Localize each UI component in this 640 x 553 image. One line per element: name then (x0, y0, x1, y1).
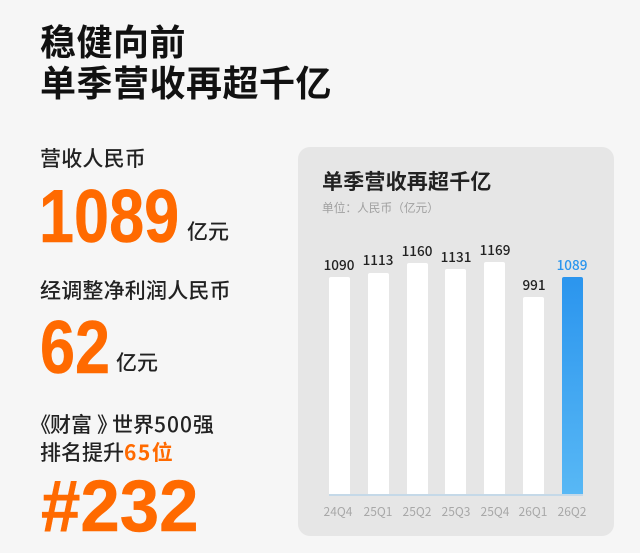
bar chart (324, 239, 587, 520)
unit: net profit: 亿元 (116, 347, 158, 377)
bar 25Q3 (445, 269, 466, 495)
unit: revenue: 亿元 (187, 216, 229, 246)
title: 单季营收再超千亿 (40, 55, 332, 107)
label 25Q3: 25Q3 (442, 503, 470, 520)
bar 26Q1 (523, 297, 544, 495)
value 1089: 1089 (557, 254, 587, 274)
label: revenue: 营收人民币 (40, 143, 146, 173)
label 25Q1: 25Q1 (364, 503, 392, 520)
label 25Q4: 25Q4 (481, 503, 509, 520)
label 24Q4: 24Q4 (324, 503, 352, 520)
bar 25Q1 (368, 273, 389, 495)
chart heading: 单季营收再超千亿 (322, 166, 492, 196)
baseline (329, 494, 583, 496)
value 1131: 1131 (441, 246, 471, 266)
panel: quarterly revenue chart (298, 147, 614, 536)
title: 稳健向前 (40, 14, 186, 66)
bar 24Q4 (329, 277, 350, 495)
label 26Q1: 26Q1 (519, 503, 547, 520)
metric: net profit 62: 62 (40, 305, 110, 389)
label: adjusted net profit: 经调整净利润人民币 (40, 275, 231, 305)
value 991: 991 (522, 274, 546, 294)
label 25Q2: 25Q2 (403, 503, 431, 520)
metric: rank 232: #232 (41, 466, 199, 547)
title (40, 14, 332, 107)
metric: revenue 1089: 1089 (39, 174, 179, 258)
value 1113: 1113 (363, 249, 393, 269)
label: Fortune 500: 排名提升65位 (40, 437, 174, 467)
bar 25Q4 (484, 262, 505, 495)
value 1169: 1169 (480, 239, 510, 259)
bar 25Q2 (407, 263, 428, 495)
bar 26Q2 (562, 277, 583, 495)
value 1090: 1090 (324, 254, 354, 274)
label: Fortune 500: 《财富》世界500强 (30, 409, 214, 439)
label 26Q2: 26Q2 (558, 503, 586, 520)
value 1160: 1160 (402, 240, 432, 260)
label: Fortune 500 (30, 409, 214, 467)
chart unit: 单位：人民币（亿元） (322, 199, 439, 216)
